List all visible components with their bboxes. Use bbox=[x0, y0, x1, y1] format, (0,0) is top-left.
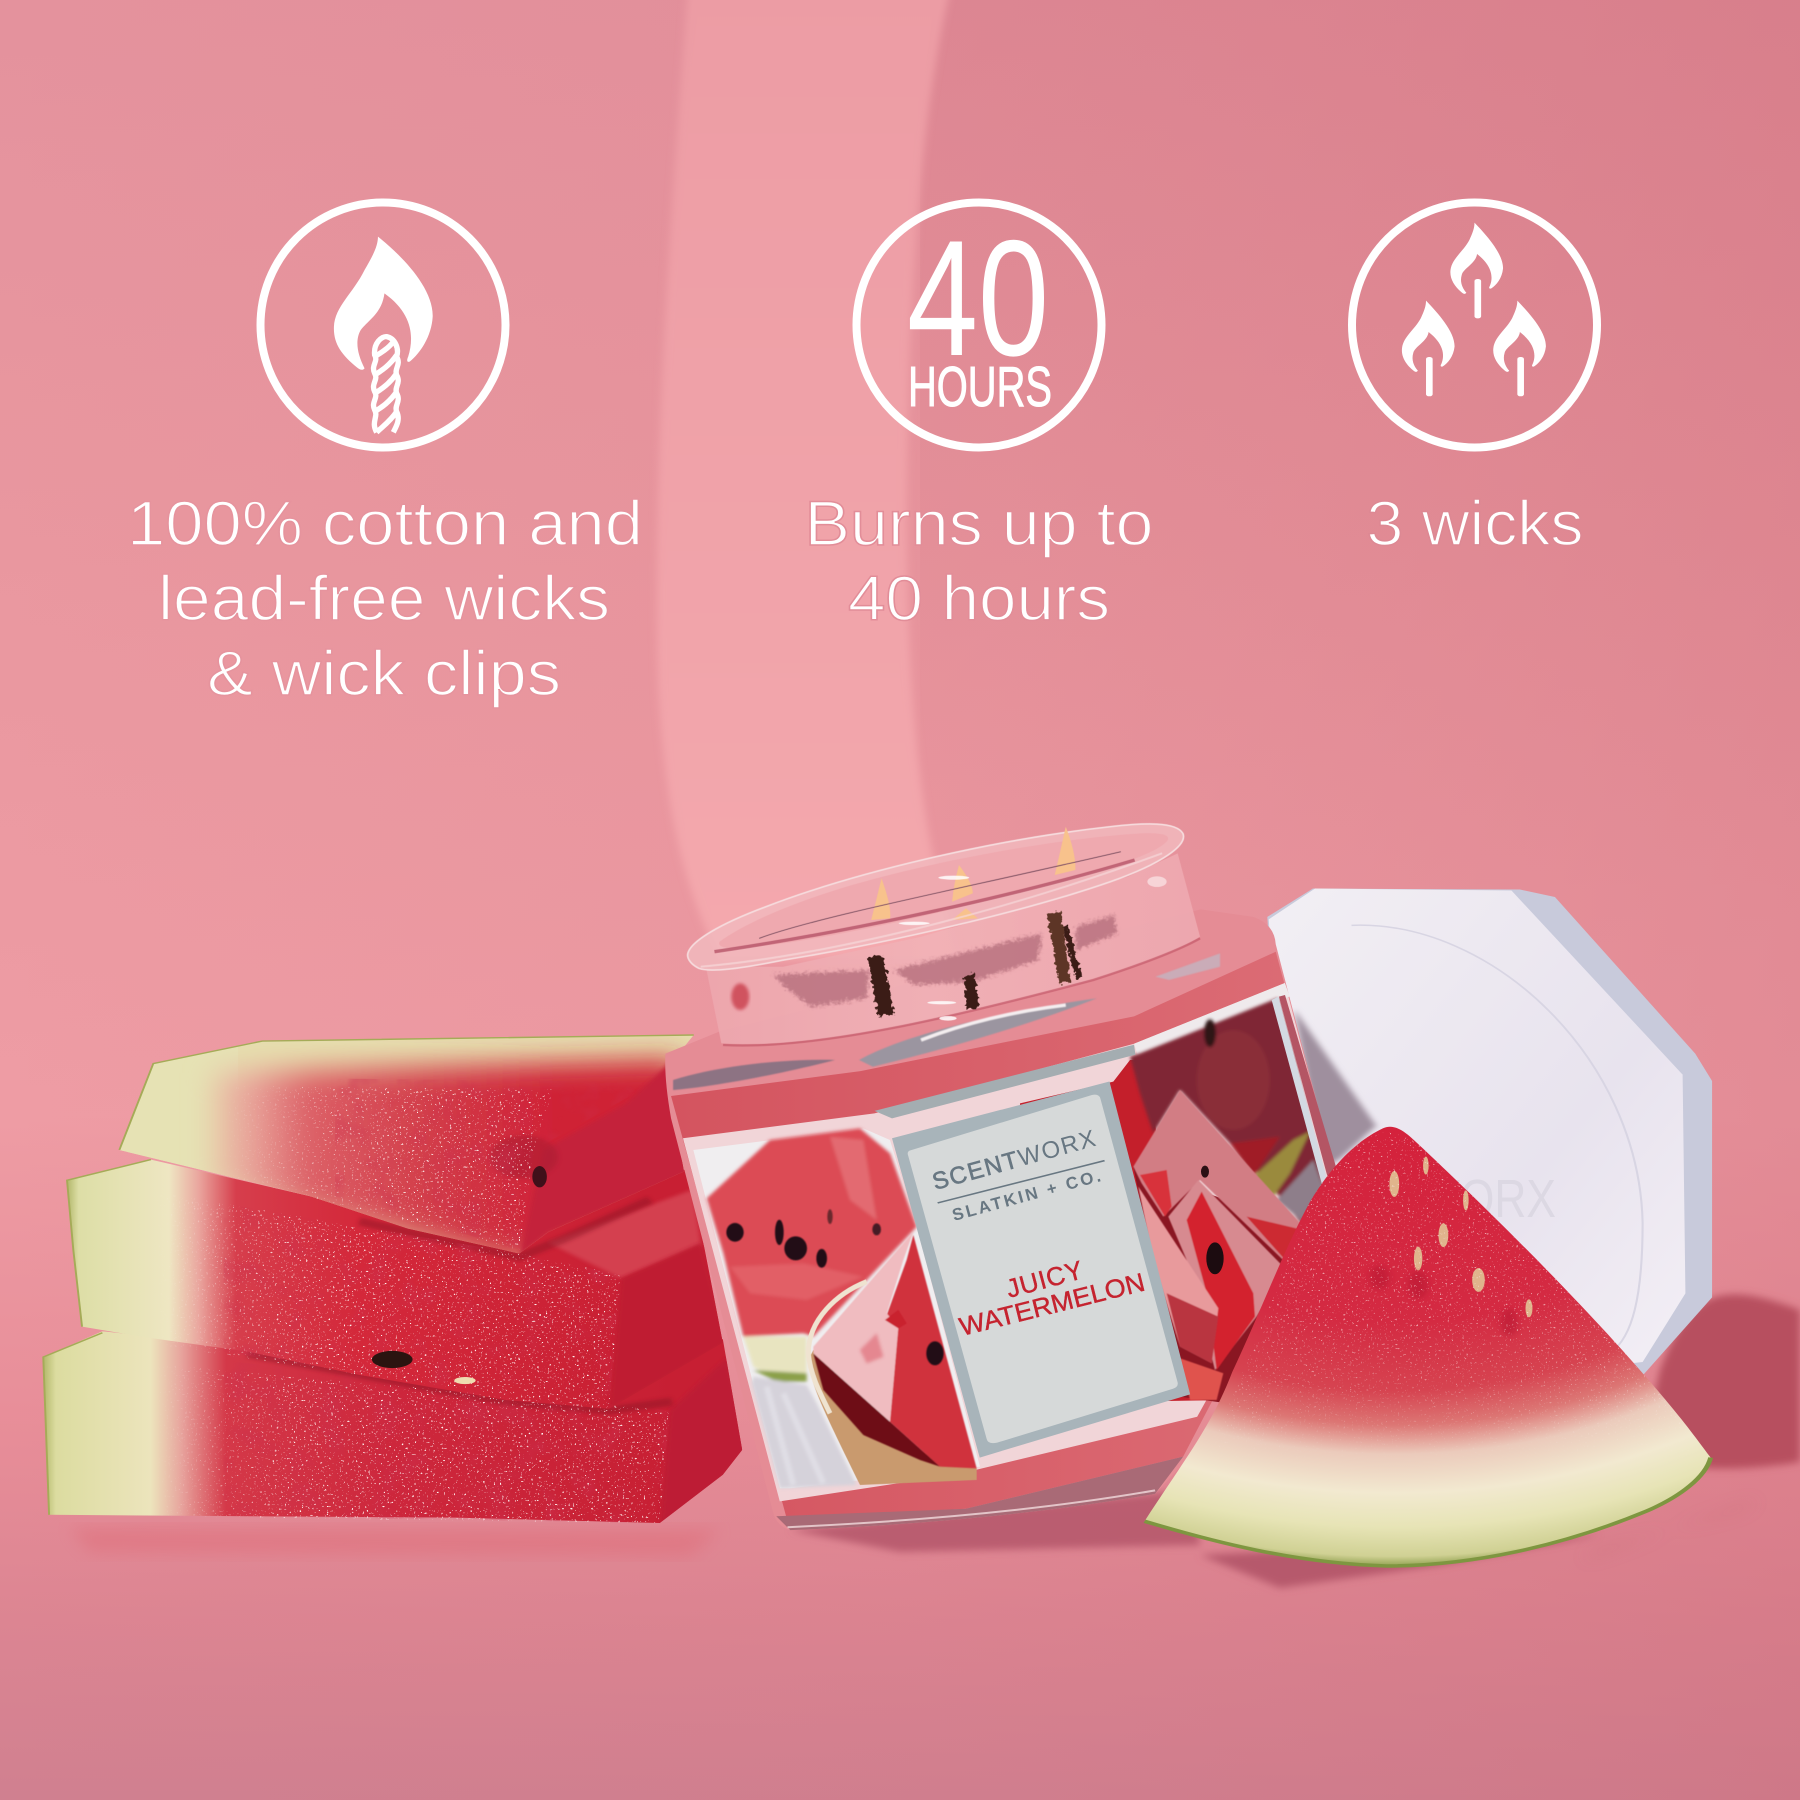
front wedge bbox=[1138, 1187, 1218, 1363]
right flame and wick bbox=[1493, 301, 1546, 396]
rim opening bbox=[719, 833, 1168, 948]
glass neck, rim, flames and wicks bbox=[673, 824, 1220, 1090]
green rind edge bbox=[1145, 1458, 1711, 1566]
wedge flesh sparkle bbox=[1220, 1132, 1676, 1444]
wax fill bbox=[671, 952, 1334, 1519]
green rind edges bbox=[43, 1035, 694, 1515]
rim lines bbox=[714, 860, 1135, 952]
feature text: burn time: Burns up to bbox=[804, 489, 1154, 559]
feature text: cotton wicks: lead-free wicks bbox=[158, 564, 610, 634]
feature icon: cotton wick bbox=[260, 202, 506, 448]
left flame and wick bbox=[1402, 301, 1455, 396]
photo seeds bbox=[726, 1209, 944, 1365]
watermelon slice stack bbox=[42, 1034, 742, 1523]
flame bbox=[334, 237, 433, 370]
word hours: HOURS bbox=[908, 355, 1052, 419]
feature text: cotton wicks: 100% cotton and bbox=[127, 489, 643, 559]
icon ring bbox=[260, 202, 506, 448]
glass base bbox=[776, 1457, 1183, 1530]
glass highlights bbox=[899, 876, 1167, 1021]
top slice bbox=[120, 1036, 693, 1254]
white strip on label top bbox=[1134, 983, 1290, 1055]
feature text: burn time bbox=[804, 489, 1154, 634]
shoulder reflections bbox=[673, 953, 1220, 1090]
sparkle on lower slices bbox=[169, 1196, 669, 1523]
mottling on flesh bbox=[224, 1079, 669, 1523]
feature text: cotton wicks bbox=[127, 489, 643, 709]
melon wedge in bowl bbox=[813, 1232, 977, 1468]
top flame and wick bbox=[1450, 223, 1503, 318]
embossed lid lettering: WORX bbox=[1418, 1169, 1556, 1229]
white octagonal lid bbox=[1267, 889, 1712, 1447]
flames bbox=[871, 827, 1075, 920]
bottom slice bbox=[44, 1331, 742, 1523]
floor shadow right of wedge bbox=[1580, 1500, 1760, 1560]
right label photo bbox=[1020, 995, 1336, 1403]
wrap label bbox=[683, 983, 1334, 1501]
rim outer band bbox=[688, 824, 1183, 970]
icon ring bbox=[1352, 202, 1597, 448]
floor shadows below jar and wedge bbox=[790, 1490, 1600, 1588]
scent name: WATERMELON bbox=[956, 1267, 1148, 1342]
feature text: wick count: 3 wicks bbox=[1366, 489, 1584, 559]
reflection below watermelon stack bbox=[70, 1528, 720, 1556]
silver band on label top bbox=[874, 1045, 1135, 1118]
silver border of front label bbox=[892, 1082, 1190, 1458]
brand name: SCENTWORX bbox=[929, 1125, 1100, 1196]
seed pits bbox=[1370, 1266, 1518, 1336]
left label photo bbox=[693, 1128, 980, 1488]
candle jar bbox=[665, 824, 1336, 1530]
scent name: JUICY bbox=[1003, 1255, 1086, 1304]
right label edge bbox=[1272, 997, 1330, 1192]
white panel of front label bbox=[908, 1095, 1178, 1443]
wedge seeds bbox=[1389, 1157, 1532, 1317]
label divider line bbox=[938, 1161, 1105, 1203]
brand subline: SLATKIN + CO. bbox=[950, 1166, 1103, 1225]
wall shadow of lid bbox=[1640, 1294, 1800, 1469]
feature text: burn time: 40 hours bbox=[848, 564, 1110, 634]
twisted wick bbox=[374, 337, 398, 432]
icon ring bbox=[856, 202, 1102, 448]
watermelon wedge bbox=[1145, 1127, 1711, 1566]
back wedge bbox=[1133, 1090, 1305, 1263]
middle slice bbox=[68, 1160, 722, 1408]
product name on label bbox=[929, 1125, 1103, 1225]
middle wedge bbox=[1168, 1180, 1285, 1370]
neck body bbox=[706, 853, 1200, 1044]
feature text: cotton wicks: & wick clips bbox=[207, 639, 561, 709]
wooden bowl bbox=[808, 1350, 977, 1485]
number 40: 40 bbox=[907, 206, 1049, 390]
wicks bbox=[868, 912, 1082, 1017]
seeds on slices bbox=[372, 1166, 547, 1384]
sparkle on top slice bbox=[234, 1086, 552, 1250]
lid shadow from jar bbox=[1294, 1009, 1376, 1168]
feature icon: 40 hours bbox=[856, 202, 1102, 448]
wick reflections bbox=[773, 915, 1117, 1007]
feature icon: 3 wicks bbox=[1352, 202, 1597, 448]
glass body bbox=[665, 909, 1334, 1530]
